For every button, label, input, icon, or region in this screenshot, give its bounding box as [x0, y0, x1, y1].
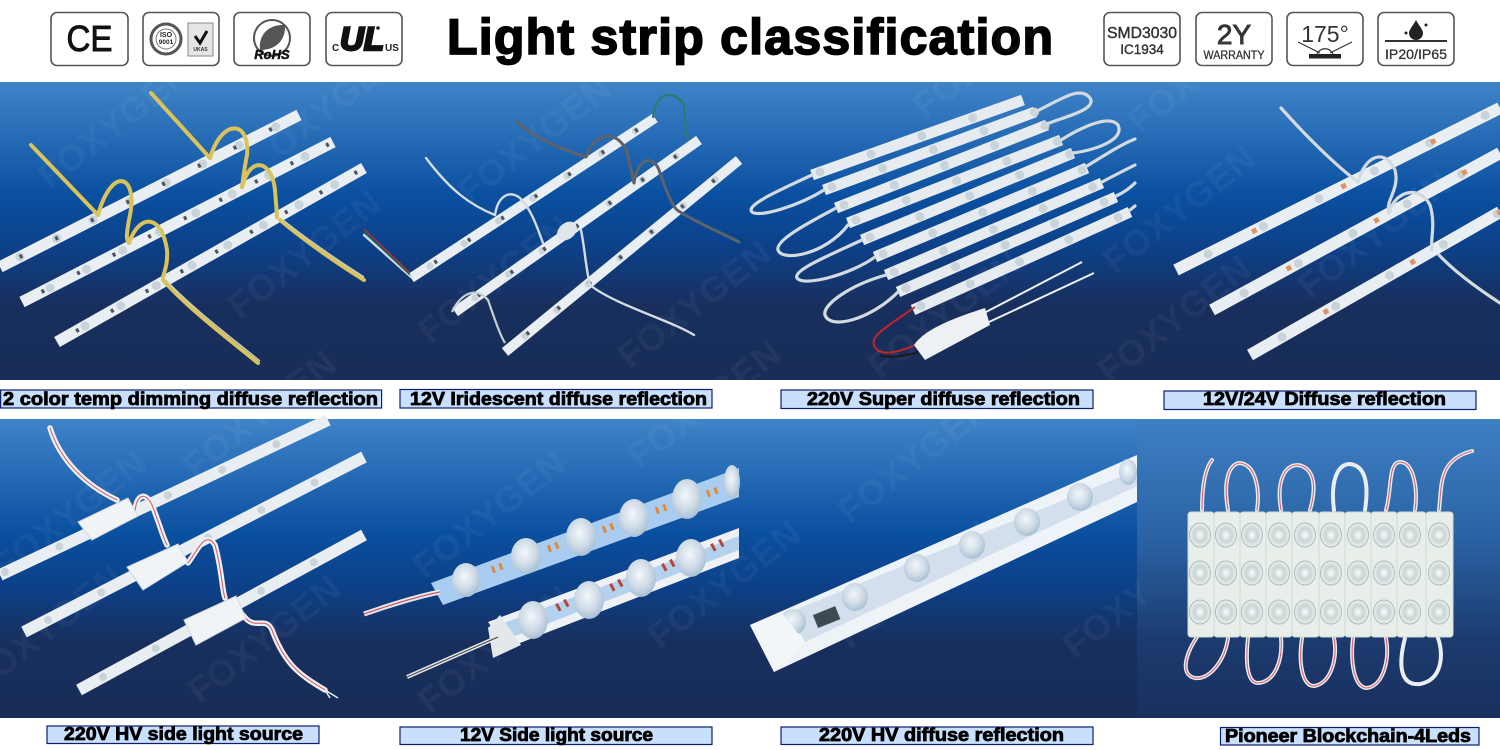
panel: top row background: [0, 0, 1500, 391]
badge: cULus: C: [332, 43, 339, 54]
label: 2 color temp dimming: 2 color temp dimming diffuse reflection: [3, 389, 378, 409]
lower strip in channel with end cap: [407, 528, 739, 677]
panel: bottom row background: FOXYGEN: [405, 441, 574, 586]
panel: top row background: FOXYGEN: [1095, 136, 1264, 281]
panel: top row background: OXYGEN: [260, 35, 411, 166]
panel: top row background: FOXYGEN: [1290, 161, 1459, 306]
aluminium profile: [750, 455, 1137, 672]
header: specification badges: [1104, 12, 1454, 66]
panel: bottom row background: FOXYGEN: [180, 566, 349, 711]
badge: ISO 9001: [143, 12, 219, 66]
panel: 12V/24V diffuse strips: [1176, 108, 1500, 355]
panel: top row background: FOXYGEN: [860, 241, 1029, 386]
yellow wires: [31, 93, 364, 363]
header: certification badges: [51, 12, 402, 66]
badge: cULus: [326, 12, 402, 66]
badge: cULus: US: [385, 43, 399, 54]
panel: top row background: FOXYGEN: [220, 181, 389, 326]
label: 12V/24V diffuse: 12V/24V Diffuse reflection: [1203, 389, 1446, 409]
panel: 12V side light strips: [364, 465, 740, 677]
badge: ISO 9001: ISO: [160, 32, 173, 39]
panel: bottom row background: FOXYGEN: [620, 331, 789, 476]
badge: 2Y warranty: 2Y: [1217, 19, 1251, 50]
badge: 175 degree beam angle: [1287, 12, 1363, 66]
label: 220V HV side light: 220V HV side light source: [64, 724, 303, 744]
nine strips: [812, 100, 1130, 310]
panel: bottom row background: FOXYGEN: [830, 511, 999, 656]
wires with red stripe: [50, 428, 338, 698]
lenses: [1190, 523, 1450, 624]
upper blue strip with domes: [364, 465, 740, 614]
panel: Pioneer Blockchain 4 LED modules: [1186, 451, 1472, 688]
label: 12V iridescent: 12V Iridescent diffuse reflection: [410, 389, 707, 409]
badge: CE: CE: [66, 18, 112, 59]
badge: ISO 9001: UKAS: [193, 47, 208, 53]
white wires: [1281, 108, 1500, 303]
dome lenses: [780, 459, 1137, 635]
badge: cULus: UL: [340, 21, 384, 57]
inner channel: [790, 470, 1137, 642]
panel: bottom row background: FOXYGEN: [830, 386, 999, 531]
label: 220V HV diffuse: 220V HV diffuse reflection: [819, 725, 1064, 745]
label: 12V side light: 12V Side light source: [460, 725, 653, 745]
label: 220V super diffuse: 220V Super diffuse reflection: [807, 389, 1080, 409]
badge: SMD3030 IC1934: [1104, 12, 1180, 66]
panel: 220V HV side light strips: [0, 420, 364, 698]
panel: bottom row background: [0, 331, 1500, 721]
badge: SMD3030 IC1934: IC1934: [1120, 42, 1164, 57]
badge: 175 degree beam angle: 175°: [1301, 21, 1349, 47]
panel: 2 color temp dimming strips: [0, 93, 364, 363]
panel: bottom row background: FOXYGEN: [175, 341, 344, 486]
connecting wire loops: [751, 93, 1135, 322]
badge: SMD3030 IC1934: SMD3030: [1107, 25, 1177, 42]
badge: IP20/IP65: IP20/IP65: [1385, 47, 1447, 62]
label: Pioneer Blockchain: Pioneer Blockchain-4Leds: [1225, 726, 1471, 746]
panel: top row background: FOXYGEN: [410, 206, 579, 351]
strips with LEDs: [0, 420, 364, 690]
panel: bottom row background: FOXYGEN: [640, 511, 809, 656]
panel: top row background: FOXYGEN: [30, 51, 199, 196]
badge: RoHS: RoHS: [254, 47, 290, 62]
bottom wire loops: [1186, 637, 1441, 688]
badge: IP20/IP65: [1378, 12, 1454, 66]
panel: bottom row background: FOXY: [1055, 571, 1160, 666]
ten modules: [1188, 512, 1453, 637]
panel: top row background: FOXYGEN: [450, 66, 619, 211]
top wire loops: [1202, 451, 1472, 510]
panel: top row background: FOXYGEN: [1120, 0, 1289, 141]
strips with LEDs: [0, 115, 364, 342]
badge: ISO 9001: 9001: [159, 39, 174, 46]
driver chip: [813, 606, 840, 628]
panel: top row background: FOXYGEN: [610, 231, 779, 376]
title: Light strip classification: [447, 9, 1053, 65]
panel: bottom row background: FOXYGEN: [410, 576, 579, 721]
label: 12V side light: [400, 725, 712, 745]
badge: RoHS: [234, 12, 310, 66]
strips with LEDs: [1176, 108, 1500, 355]
panel: 220V HV diffuse bar: [750, 455, 1137, 672]
wires: [364, 95, 739, 343]
end cap: [750, 612, 805, 672]
badge: CE: [51, 12, 128, 66]
label: 12V/24V diffuse: [1164, 389, 1476, 410]
badge: 2Y warranty: WARRANTY: [1204, 50, 1265, 62]
strips with LEDs: [411, 118, 739, 352]
panel: 220V super diffuse strips: [751, 93, 1135, 360]
badge: 2Y warranty: [1196, 12, 1272, 66]
panel: 12V iridescent strips: [364, 95, 739, 352]
driver box with leads: [873, 262, 1094, 360]
connectors: [78, 498, 246, 645]
panel: top row background: FOXYGEN: [1090, 246, 1259, 391]
